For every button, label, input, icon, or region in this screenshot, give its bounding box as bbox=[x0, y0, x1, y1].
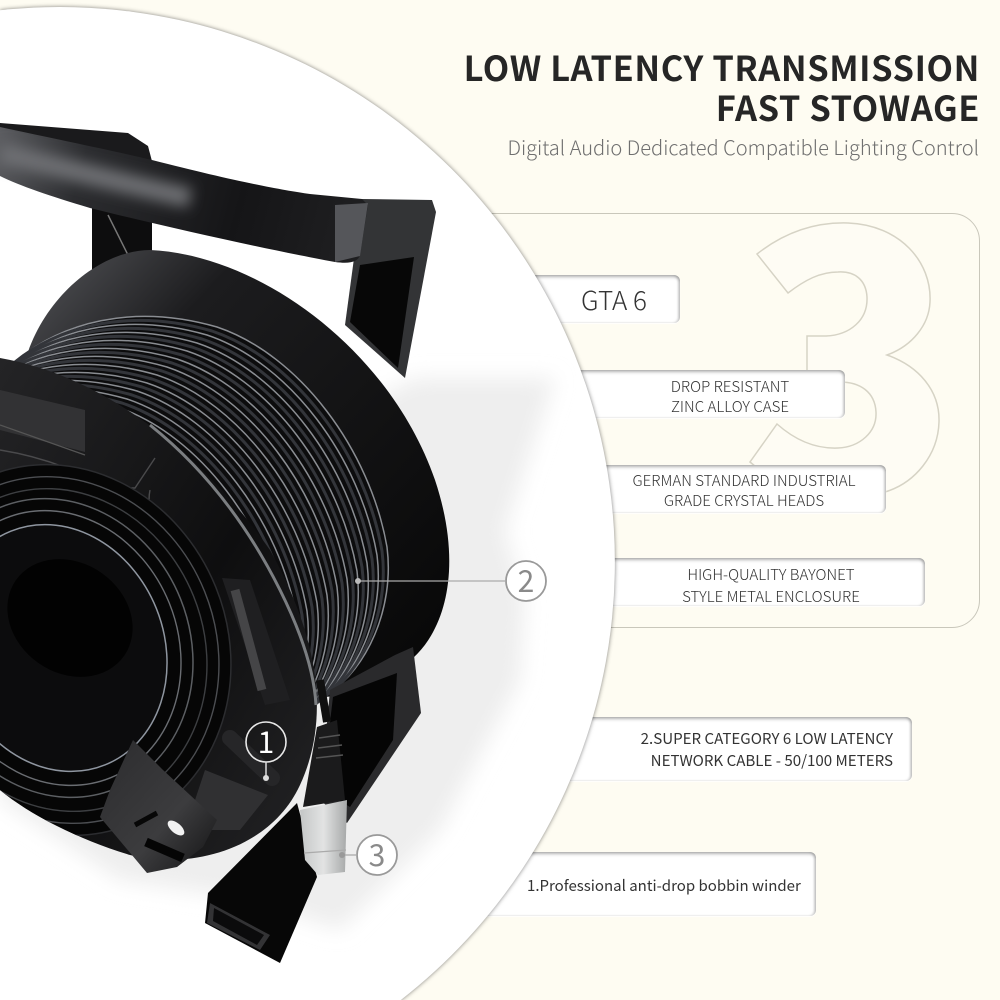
cable coil bbox=[0, 316, 388, 772]
label: bobbin winder bbox=[400, 852, 816, 916]
label: GTA 6 bbox=[480, 275, 680, 323]
callout 3 bbox=[339, 831, 398, 876]
callout 3: 3 bbox=[369, 831, 385, 875]
label: GTA 6: GTA 6 bbox=[581, 281, 647, 318]
white circle background bbox=[0, 7, 615, 1000]
label: crystal heads bbox=[560, 465, 886, 513]
label: network cable: NETWORK CABLE - 50/100 METERS bbox=[651, 749, 893, 771]
product photo: cable reel on white circle bbox=[0, 4, 618, 1000]
rear flange bbox=[28, 250, 449, 697]
label: crystal heads: GRADE CRYSTAL HEADS bbox=[664, 489, 824, 511]
label: bayonet enclosure: STYLE METAL ENCLOSURE bbox=[682, 585, 860, 607]
label: network cable bbox=[480, 717, 912, 781]
right bracket bbox=[345, 199, 436, 378]
title bbox=[464, 41, 980, 130]
front cable ring bbox=[0, 464, 232, 836]
handle tab bbox=[0, 123, 153, 165]
callout 1: 1 bbox=[258, 718, 274, 762]
grip recess bbox=[230, 738, 272, 778]
callout 2 bbox=[355, 557, 547, 602]
callout 2: 2 bbox=[518, 557, 534, 601]
small rear bracket bbox=[92, 208, 152, 272]
flange moulding lines bbox=[0, 450, 175, 532]
XLR connector bbox=[300, 680, 347, 875]
label: crystal heads: GERMAN STANDARD INDUSTRIAL bbox=[632, 469, 856, 491]
front flange bbox=[0, 358, 317, 887]
centre hole bbox=[0, 535, 156, 701]
title: LOW LATENCY TRANSMISSION bbox=[464, 41, 980, 91]
label: drop resistant case bbox=[520, 370, 845, 418]
handle and frame bbox=[0, 123, 436, 378]
clip piece bbox=[100, 740, 217, 873]
label: bobbin winder: 1.Professional anti-drop bobbin winder bbox=[527, 875, 801, 896]
cast shadow bbox=[0, 378, 555, 930]
label: drop resistant case: DROP RESISTANT bbox=[671, 375, 789, 397]
handle bar bbox=[0, 127, 368, 263]
callout 1 bbox=[245, 718, 287, 781]
label: bayonet enclosure: HIGH-QUALITY BAYONET bbox=[687, 563, 855, 585]
panel: specification box bbox=[440, 213, 980, 628]
subtitle: Digital Audio Dedicated Compatible Lighting Control bbox=[507, 132, 979, 161]
side slot bbox=[222, 578, 290, 705]
label: bayonet enclosure bbox=[570, 558, 925, 606]
label plate bbox=[0, 390, 85, 452]
label: network cable: 2.SUPER CATEGORY 6 LOW LATENCY bbox=[641, 727, 893, 749]
label: drop resistant case: ZINC ALLOY CASE bbox=[671, 395, 789, 417]
stand foot bbox=[205, 647, 421, 963]
title: FAST STOWAGE bbox=[716, 80, 980, 130]
